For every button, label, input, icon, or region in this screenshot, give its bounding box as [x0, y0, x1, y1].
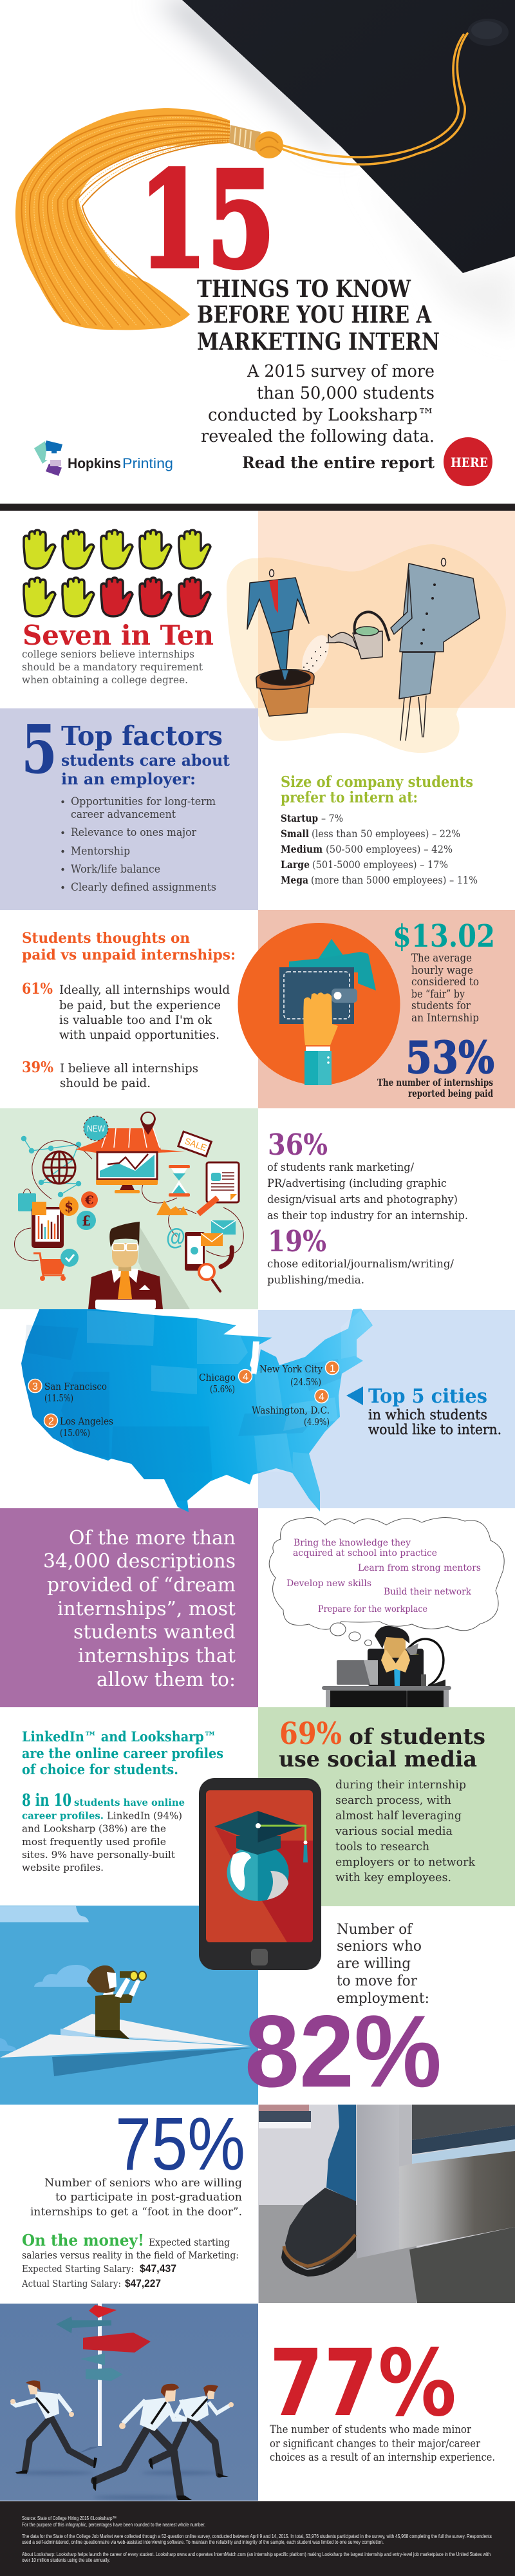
- stat: 61%: with unpaid opportunities.: [59, 1028, 220, 1042]
- stat: 61%: is valuable too and I'm ok: [59, 1013, 212, 1027]
- icon: signpost: [56, 2304, 151, 2454]
- photo: door edge: [357, 2105, 399, 2259]
- text: social media detail: search process, with: [335, 1794, 451, 1807]
- flower pot: [259, 683, 310, 716]
- report link text: Read the entire report: [242, 453, 435, 472]
- stat: 39%: [22, 1059, 198, 1090]
- text: online profiles detail: [22, 1791, 185, 1873]
- icon: currency coins: £: [82, 1213, 91, 1229]
- stat: 61%: 61%: [22, 980, 53, 998]
- text: sources: over 10 million students using the site annually.: [22, 2557, 110, 2563]
- list: what students want: Build their network: [384, 1587, 471, 1597]
- text: number of seniors: [337, 1922, 429, 2007]
- stat: 39%: 39%: [22, 1059, 53, 1076]
- panel: runners illustration: [0, 2304, 258, 2501]
- text: seven in ten description: [22, 649, 203, 686]
- text: social media detail: during their internship: [335, 1778, 466, 1792]
- number 15: 15: [139, 143, 275, 298]
- text: social media detail: with key employees.: [335, 1871, 451, 1884]
- icon: globe: [43, 1151, 75, 1184]
- text: social media detail: almost half leveraging: [335, 1809, 462, 1823]
- marker: washington dc: (4.9%): [304, 1416, 330, 1428]
- heading: company size: prefer to intern at:: [281, 789, 418, 806]
- panel: top cities background: [258, 1310, 515, 1508]
- panel: paid vs unpaid text: [22, 930, 236, 1090]
- button: here: [444, 437, 492, 486]
- illustration: woman watering suit in pot: [247, 558, 480, 741]
- cap lower soft shadow: [360, 167, 515, 335]
- marker: los angeles: [44, 1414, 113, 1439]
- text: sources: [22, 2515, 492, 2563]
- panel: social media: [258, 1707, 515, 1906]
- intro text: conducted by Looksharp™: [208, 406, 435, 425]
- text: online profiles detail: career profiles.: [22, 1810, 104, 1821]
- list: company sizes: Startup: [281, 812, 318, 824]
- cloud: left: [0, 2038, 17, 2051]
- photo: jeans: [326, 2105, 356, 2202]
- text: salaries: Actual Starting Salary:: [21, 2278, 121, 2289]
- photo: boot: [281, 2188, 356, 2277]
- badge: new: NEW: [87, 1123, 106, 1133]
- marker: new york city: (24.5%): [290, 1376, 321, 1388]
- text: foot in the door: Number of seniors who are willing: [44, 2177, 242, 2190]
- text: social media detail: employers or to network: [335, 1855, 476, 1869]
- list: company sizes: (more than 5000 employees) – 11%: [311, 874, 478, 886]
- text: foot in the door: [30, 2177, 242, 2219]
- list: factors: Relevance to ones major: [71, 826, 197, 839]
- text: online profiles detail: sites. 9% have personally-built: [22, 1849, 175, 1861]
- text: online profiles detail: students have online: [74, 1797, 185, 1808]
- button: here: HERE: [451, 455, 488, 470]
- list: what students want: Learn from strong mentors: [358, 1563, 481, 1573]
- badge: new: [84, 1116, 108, 1141]
- stat: 36%: 36%: [268, 1128, 328, 1162]
- icon: network: [22, 1136, 81, 1197]
- text: top cities description: in which students: [368, 1407, 487, 1423]
- icon: pencil: [198, 1198, 218, 1214]
- text: dream internships: Of the more than: [69, 1527, 236, 1549]
- icon: graduation cap: [182, 0, 515, 273]
- text: online profiles detail: LinkedIn (94%): [107, 1810, 182, 1821]
- text: hourly wage: be “fair” by: [411, 988, 465, 1001]
- heading: online career profiles: [22, 1728, 223, 1777]
- icon: tassel: [15, 108, 283, 330]
- marker: new york city: New York City: [259, 1363, 323, 1375]
- text: top cities description: [368, 1407, 501, 1437]
- text: dream internships: allow them to:: [97, 1669, 236, 1691]
- heading: use social media: of students: [349, 1724, 485, 1750]
- callout: top 5 cities: [346, 1385, 501, 1437]
- text: salaries: $47,227: [125, 2277, 161, 2289]
- panel: seven in ten background: [227, 511, 515, 753]
- text: top cities description: would like to intern.: [368, 1422, 501, 1437]
- marker: los angeles: (15.0%): [60, 1427, 90, 1439]
- heading: company size: Size of company students: [281, 773, 473, 791]
- icon: shopping cart: [33, 1249, 79, 1281]
- text: sources: used a self-administered, online questionnaire via web-assisted interviewing software. To maintain the reliability and integrity of the sample, each student was limited to one survey completion.: [22, 2539, 384, 2545]
- text: paid internships: [377, 1077, 493, 1099]
- marker: san francisco: San Francisco: [44, 1381, 107, 1392]
- illustration: marketing man: [88, 1222, 163, 1309]
- stat: 39%: I believe all internships: [60, 1061, 198, 1075]
- text: editorial industry: [267, 1258, 454, 1287]
- title: THINGS TO KNOW: [197, 276, 411, 303]
- arrow: pointing left: [346, 1387, 363, 1405]
- stat: 61%: be paid, but the experience: [59, 998, 221, 1012]
- marker: los angeles: 2: [48, 1416, 54, 1427]
- title: [197, 276, 440, 355]
- stat: 19%: 19%: [268, 1224, 326, 1258]
- icon: hourglass: [169, 1165, 190, 1197]
- panel: wages: [238, 910, 515, 1108]
- text: marketing industry: as their top industry for an internship.: [267, 1209, 468, 1222]
- list: company sizes: Small: [281, 828, 309, 840]
- text: career changes: or significant changes to their major/career: [270, 2438, 481, 2450]
- tag: sale: [178, 1132, 211, 1156]
- icons: ten raised hands: [24, 530, 211, 616]
- illustration: runner right: [149, 2385, 234, 2477]
- panel: company size: [281, 773, 478, 886]
- text: hourly wage: an Internship: [411, 1012, 479, 1025]
- text: salaries: salaries versus reality in the field of Marketing:: [22, 2249, 239, 2261]
- illustration: woman with binoculars: [87, 1965, 146, 2039]
- icon: mail and phone: @: [166, 1224, 185, 1250]
- marker: washington dc: Washington, D.C.: [252, 1405, 330, 1416]
- list: what students want: acquired at school into practice: [293, 1548, 437, 1558]
- text: dream internships: internships”, most: [57, 1598, 236, 1620]
- heading: top factors: in an employer:: [61, 770, 196, 788]
- panel: footer: [0, 2501, 515, 2576]
- list: company sizes: [281, 812, 478, 886]
- panel: linkedin profiles: [22, 1728, 223, 1873]
- text: sources: Source: State of College Hiring 2015 ©Looksharp™: [22, 2515, 117, 2521]
- heading: online career profiles: are the online career profiles: [22, 1745, 223, 1761]
- list: what students want: Bring the knowledge they: [294, 1538, 411, 1548]
- panel: purple dream internships: [0, 1508, 258, 1707]
- tassel metal band: [229, 125, 261, 152]
- marker: chicago: Chicago: [199, 1372, 236, 1383]
- stat: 69%: 69%: [279, 1716, 342, 1752]
- stat: 75%: 75%: [115, 2102, 245, 2186]
- text: dream internships: provided of “dream: [47, 1574, 236, 1596]
- arrows: [15, 1141, 243, 1261]
- list: factors: career advancement: [71, 808, 176, 821]
- mortarboard: [236, 1836, 281, 1855]
- heading: online career profiles: LinkedIn™ and Looksharp™: [22, 1728, 216, 1745]
- icon: hand holding wallet: [238, 923, 400, 1085]
- text: salaries: $47,437: [140, 2262, 176, 2275]
- stat: 61%: Ideally, all internships would: [59, 983, 230, 997]
- text: number of seniors: seniors who: [337, 1938, 422, 1955]
- list: company sizes: – 7%: [321, 812, 343, 824]
- text: salaries: Expected Starting Salary:: [22, 2263, 134, 2275]
- text: hourly wage: students for: [411, 999, 471, 1012]
- text: number of seniors: are willing: [337, 1956, 411, 1972]
- marker: san francisco: (11.5%): [44, 1392, 73, 1404]
- text: number of seniors: to move for: [337, 1973, 417, 1989]
- list: factors: Opportunities for long-term: [71, 795, 216, 808]
- text: dream internships: 34,000 descriptions: [43, 1550, 236, 1573]
- marker: san francisco: 3: [32, 1381, 38, 1392]
- marker: new york city: [259, 1361, 339, 1388]
- text: career changes: [270, 2423, 495, 2464]
- title: BEFORE YOU HIRE A: [197, 301, 432, 328]
- icon: monitor chart: [96, 1152, 158, 1193]
- marker: washington dc: 4: [319, 1392, 324, 1403]
- heading: top factors: students care about: [61, 751, 230, 770]
- illustration: thought bubble: [269, 1517, 504, 1646]
- suit plant: [247, 578, 309, 633]
- stat: 61%: [22, 980, 230, 1042]
- stat: 53%: 53%: [406, 1032, 494, 1084]
- list: what students want: Prepare for the workplace: [318, 1604, 427, 1615]
- list: company sizes: Large: [281, 858, 310, 871]
- text: marketing industry: of students rank marketing/: [267, 1161, 414, 1174]
- list: company sizes: (less than 50 employees) – 22%: [312, 828, 460, 840]
- cloud: middle: [34, 1965, 93, 1987]
- illustration: person at desk: [322, 1626, 451, 1707]
- list: what students want: [286, 1538, 481, 1615]
- icon: shopping bags: [18, 1189, 46, 1215]
- text: salaries: [21, 2237, 239, 2289]
- heading: on the money: On the money!: [22, 2231, 144, 2249]
- text: foot in the door: internships to get a “foot in the door”.: [30, 2206, 242, 2219]
- icon: paper plane: [0, 2014, 251, 2076]
- text: marketing industry: PR/advertising (including graphic: [267, 1177, 447, 1190]
- logo: hopkins printing: Printing: [122, 455, 173, 471]
- list: company sizes: (501-5000 employees) – 17%: [312, 858, 448, 871]
- icon: currency coins: [59, 1191, 98, 1230]
- text: dream internships: students wanted: [73, 1621, 236, 1643]
- intro text: revealed the following data.: [201, 427, 435, 446]
- text: foot in the door: to participate in post-graduation: [55, 2191, 242, 2204]
- panel: foot in the door photo: [258, 2105, 515, 2303]
- text: hourly wage: considered to: [411, 976, 479, 989]
- logo: hopkins printing: Hopkins: [68, 455, 121, 471]
- text: editorial industry: publishing/media.: [267, 1274, 364, 1287]
- text: online profiles detail: most frequently used profile: [22, 1836, 166, 1848]
- icon: tassel cord: [283, 33, 467, 164]
- water spray: [297, 631, 334, 679]
- marker: san francisco: [28, 1379, 107, 1404]
- stat: 82%: 82%: [245, 1994, 442, 2108]
- text: online profiles detail: website profiles.: [22, 1862, 104, 1873]
- text: seven in ten description: when obtaining a college degree.: [22, 674, 188, 686]
- icon: currency coins: $: [64, 1198, 73, 1215]
- big number 5: 5: [21, 710, 57, 789]
- stat: 77%: 77%: [269, 2329, 456, 2437]
- text: number of seniors: employment:: [337, 1991, 429, 2007]
- list: factors: [61, 795, 216, 894]
- text: marketing industry: design/visual arts and photography): [267, 1193, 458, 1206]
- text: dream internships: internships that: [78, 1645, 236, 1667]
- heading: paid vs unpaid: [22, 930, 236, 963]
- list: factors: Mentorship: [71, 845, 130, 858]
- list: company sizes: (50-500 employees) – 42%: [326, 843, 453, 855]
- heading: company size: [281, 773, 473, 806]
- text: dream internships: [43, 1527, 236, 1691]
- marker: chicago: (5.6%): [210, 1383, 235, 1395]
- heading: online career profiles: of choice for students.: [22, 1761, 178, 1777]
- text: paid internships: reported being paid: [408, 1088, 493, 1099]
- photo: window left: [259, 2105, 311, 2128]
- list: factors: Work/life balance: [71, 863, 160, 876]
- panel: willing to move: [245, 1922, 442, 2108]
- map: united states: [21, 1309, 373, 1512]
- text: seven in ten description: college seniors believe internships: [22, 649, 194, 660]
- cloud: top: [0, 1906, 89, 1922]
- stat: 39%: should be paid.: [60, 1076, 151, 1090]
- text: seven in ten description: should be a mandatory requirement: [22, 661, 203, 673]
- marker: chicago: [199, 1369, 252, 1395]
- cap shadow: [154, 0, 348, 151]
- heading: seven in ten: Seven in Ten: [23, 620, 214, 651]
- heading: top 5 cities: Top 5 cities: [368, 1385, 487, 1408]
- text: career changes: The number of students who made minor: [270, 2423, 472, 2436]
- panel: top industries: [267, 1128, 468, 1287]
- marker: new york city: 1: [330, 1363, 335, 1374]
- marker: chicago: 4: [243, 1372, 248, 1383]
- list: company sizes: Medium: [281, 843, 323, 855]
- icon: map pin: [140, 1112, 156, 1135]
- panel: paper plane sky: [0, 1906, 258, 2105]
- list: factors: Clearly defined assignments: [71, 881, 216, 894]
- text: social media detail: tools to research: [335, 1840, 429, 1853]
- heading: use social media: [279, 1724, 485, 1772]
- intro text: [201, 362, 435, 446]
- heading: top factors: [61, 721, 230, 788]
- text: online profiles detail: and Looksharp (38%) are the: [22, 1823, 166, 1834]
- text: social media detail: [335, 1778, 476, 1884]
- tag: sale: SALE: [183, 1135, 208, 1153]
- icon: phone chart: [32, 1202, 64, 1248]
- photo: door panel: [399, 2105, 515, 2249]
- icon: mountains: [156, 1200, 188, 1215]
- heading: use social media: use social media: [279, 1747, 477, 1772]
- text: editorial industry: chose editorial/journalism/writing/: [267, 1258, 454, 1271]
- panel: post graduation internships: [21, 2102, 245, 2289]
- list: what students want: Develop new skills: [286, 1578, 371, 1589]
- panel: career changes: [269, 2329, 495, 2464]
- photo: floor: [259, 2205, 417, 2303]
- icon: smartphone with graduation globe: [199, 1778, 321, 1970]
- marker: los angeles: Los Angeles: [60, 1416, 113, 1427]
- marker: washington dc: [252, 1390, 330, 1428]
- globe: [227, 1844, 288, 1901]
- title: MARKETING INTERN: [197, 328, 440, 355]
- list: company sizes: Mega: [281, 874, 308, 886]
- illustration: runner left: [10, 2380, 97, 2474]
- text: online profiles detail: 8 in 10: [22, 1791, 71, 1810]
- panel: five top factors: [0, 708, 258, 910]
- icon: mail and phone: [166, 1220, 236, 1291]
- text: sources: For the purpose of this infographic, percentages have been rounded to the nearest whole number.: [22, 2521, 205, 2528]
- stat: hourly wage: $13.02: [393, 918, 495, 954]
- heading: paid vs unpaid: Students thoughts on: [22, 930, 190, 947]
- man shadow: [138, 1227, 190, 1309]
- foot shadows: [16, 2471, 219, 2499]
- icon: storefront awning: [75, 1128, 185, 1153]
- text: hourly wage: [411, 952, 479, 1025]
- text: hourly wage: The average: [411, 952, 472, 965]
- intro text: A 2015 survey of more: [247, 362, 435, 381]
- divider bar: [0, 504, 515, 511]
- intro text: than 50,000 students: [257, 384, 435, 403]
- icon: currency coins: €: [84, 1193, 94, 1208]
- text: hourly wage: hourly wage: [411, 964, 473, 977]
- watering can: [353, 631, 382, 659]
- panel: hero: [0, 0, 515, 504]
- illustration: runner front: [92, 2384, 192, 2500]
- text: marketing industry: [267, 1161, 468, 1222]
- heading: paid vs unpaid: paid vs unpaid internships:: [22, 947, 236, 963]
- text: number of seniors: Number of: [337, 1922, 413, 1938]
- icon: document tablet: [207, 1162, 239, 1202]
- heading: top factors: Top factors: [61, 721, 223, 752]
- text: salaries: Expected starting: [149, 2237, 230, 2248]
- text: social media detail: various social media: [335, 1824, 453, 1838]
- panel: marketing illustration: [0, 1108, 258, 1309]
- tassel knot: [255, 131, 283, 158]
- dressed woman: [400, 564, 480, 652]
- logo: hopkins printing: [34, 440, 173, 476]
